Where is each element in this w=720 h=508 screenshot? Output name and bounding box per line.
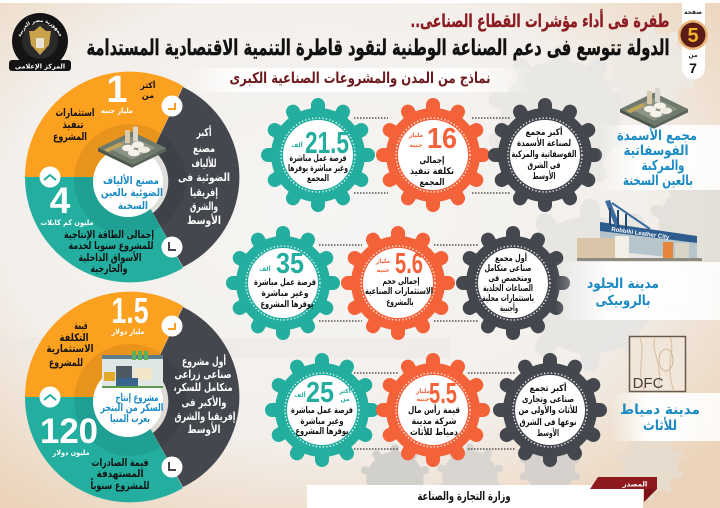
row 1 gear: jobs: ألف bbox=[291, 141, 303, 149]
page badge: من bbox=[688, 52, 698, 59]
row 1 gear: description bbox=[495, 105, 595, 205]
stat: production capacity: 4 bbox=[50, 180, 71, 221]
label: Damietta furniture city bbox=[610, 336, 720, 441]
orange segment bbox=[25, 72, 183, 177]
row 3 gear: capital: مليار bbox=[415, 388, 430, 395]
row 1 gear: jobs: 21.5 bbox=[305, 125, 349, 160]
row 3 gear: capital: قيمة رأس مال bbox=[408, 404, 460, 416]
centre label: بغرب المنيا bbox=[110, 413, 150, 425]
icon: DFC logo: DFC bbox=[633, 375, 664, 392]
stat: investment cost: مليار دولار bbox=[111, 327, 145, 336]
chevron nodes bbox=[40, 96, 182, 258]
row 1 gear: cost: إجمالى bbox=[420, 156, 444, 166]
stat: investment cost: 1.5 bbox=[112, 290, 148, 331]
icon: leather city building: Robbiki Leather City bbox=[611, 227, 670, 241]
row 3 gear: capital: شركة مدينة bbox=[412, 417, 457, 427]
stat: exports bbox=[40, 412, 150, 492]
stat: exports: للمشروع سنوياً bbox=[90, 478, 150, 492]
dark text: إفريقيا bbox=[190, 186, 218, 199]
stat: investments bbox=[53, 69, 156, 143]
row 2 gear: jobs: يوفرها المشروع bbox=[260, 300, 314, 310]
orange segment bbox=[25, 292, 183, 397]
row 2 gear: description: وأجنبية bbox=[500, 302, 518, 314]
source box bbox=[307, 477, 657, 508]
row 3 gear: jobs: أكثر bbox=[338, 387, 351, 395]
centre white disc bbox=[93, 367, 163, 437]
row 2 gear: investment: بالمشروع bbox=[386, 298, 414, 308]
icon: factory bbox=[98, 127, 166, 168]
centre label: السخنة bbox=[118, 200, 148, 212]
label: fertilizer complex bbox=[598, 88, 720, 190]
dark text: أكبر bbox=[196, 125, 212, 139]
dark text: الضوئية فى bbox=[178, 171, 230, 184]
dark text: والأكبر فى bbox=[182, 395, 227, 409]
stat: production capacity: الأسواق الداخلية bbox=[78, 251, 142, 264]
dark text: مصنع bbox=[193, 142, 215, 155]
row 1 gear: jobs: فرصة عمل مباشرة bbox=[290, 154, 347, 164]
row 3 gear: jobs: فرصة عمل مباشرة bbox=[291, 406, 353, 416]
stat: investment cost bbox=[46, 290, 148, 369]
dark text: صناعى زراعى bbox=[174, 368, 232, 381]
row 2 gear: description bbox=[463, 233, 563, 333]
row 2 gear: investment: مليار bbox=[375, 258, 390, 265]
row 2 gear: investment: 5.6 bbox=[395, 248, 423, 280]
stat: exports: 120 bbox=[40, 412, 98, 451]
row 3 gear: capital: 5.5 bbox=[429, 378, 457, 410]
row 2 gear: description: صناعى متكامل bbox=[484, 264, 532, 274]
centre label: مصنع الألياف bbox=[103, 174, 159, 187]
dark text: أول مشروع bbox=[182, 354, 226, 368]
row 3 gear: capital: جنيه bbox=[417, 396, 429, 403]
stat: investment cost: للمشروع bbox=[49, 357, 83, 369]
dark text bbox=[178, 125, 230, 227]
row 3 gear: capital: دمياط للأثاث bbox=[410, 426, 458, 438]
donut 2: sugar beet project bbox=[25, 290, 239, 502]
row 1 gear: cost: تكلفة تنفيذ bbox=[410, 167, 454, 177]
stat: exports: مليون دولار bbox=[52, 448, 90, 457]
label: Damietta furniture city: للأثاث bbox=[643, 417, 677, 434]
stat: investment cost: التكلفة bbox=[60, 332, 88, 344]
row 3 gear: description: صناعى وتجارى bbox=[522, 395, 574, 405]
logo: media center bbox=[9, 13, 71, 71]
teal segment bbox=[25, 177, 183, 282]
row 1 gear: cost: جنيه bbox=[410, 142, 422, 149]
inner shade ring bbox=[74, 344, 186, 456]
stat: production capacity: للمشروع سنويا لخدمة bbox=[68, 240, 154, 252]
dark text: إفريقيا والشرق bbox=[174, 410, 236, 423]
label: Damietta furniture city: مدينة دمياط bbox=[620, 402, 700, 418]
row 2 gear: investment: الاستثمارات الصناعية bbox=[365, 287, 433, 297]
row 3 gear: description: الأوسط bbox=[537, 427, 559, 439]
dark text: للألياف bbox=[192, 156, 216, 170]
stat: investments: من bbox=[142, 91, 154, 100]
row 2 gear: jobs: فرصة عمل مباشرة bbox=[254, 278, 316, 288]
stat: investments: 1 bbox=[106, 69, 128, 111]
label: fertilizer complex: الفوسفاتية bbox=[624, 143, 688, 159]
dark segment bbox=[153, 307, 239, 487]
label: fertilizer complex: والمركبة bbox=[642, 158, 684, 174]
centre white disc bbox=[93, 147, 163, 217]
stat: investments: أكثر bbox=[140, 80, 156, 90]
row 1 gear: cost: المجمع bbox=[420, 178, 444, 188]
page badge: صفحة bbox=[684, 9, 702, 16]
dark segment bbox=[153, 87, 239, 267]
row 2 gear: description: الصناعات الجلدية bbox=[483, 284, 533, 294]
label: Robbiki leather city: مدينة الجلود bbox=[587, 276, 659, 292]
row 3 gear: jobs: ألف bbox=[294, 391, 306, 399]
row 2 gear: investment: جنيه bbox=[377, 267, 389, 274]
row 2 gear: jobs: 35 bbox=[276, 248, 304, 280]
centre label bbox=[100, 392, 164, 425]
dark text bbox=[174, 354, 236, 436]
row 1 gear: jobs bbox=[268, 105, 368, 205]
stat: exports: المستهدفة bbox=[96, 468, 144, 480]
row 3 gear: jobs: من bbox=[340, 396, 350, 403]
row 2 gear: jobs: ألف bbox=[259, 265, 271, 273]
icon: fertilizer plant bbox=[620, 88, 688, 129]
centre label: مشروع إنتاج bbox=[116, 392, 158, 404]
row 3 gear: jobs: وغير مباشرة bbox=[300, 417, 344, 427]
label: Robbiki leather city bbox=[555, 200, 720, 320]
centre label: الضوئية بالعين bbox=[101, 187, 163, 199]
row 1 gear: jobs: المجمع bbox=[307, 174, 329, 184]
dark text: الأوسط bbox=[188, 422, 220, 436]
icon: sugar factory bbox=[102, 351, 163, 388]
row 3 gear: description: أكبر تجمع bbox=[530, 382, 566, 394]
row 1 gear: description: أكبر مجمع bbox=[526, 126, 562, 138]
row 1 gear: cost bbox=[383, 105, 483, 205]
row 1 gear: description: الأوسط bbox=[532, 170, 556, 182]
stat: production capacity: مليون كم كابلات bbox=[40, 218, 94, 227]
inner shade ring bbox=[74, 124, 186, 236]
subheading band: نماذج من المدن والمشروعات الصناعية الكبرى bbox=[230, 69, 490, 87]
row 3 gear: description: للأثاث والأولى من bbox=[518, 404, 578, 416]
page badge: 7 bbox=[689, 60, 697, 76]
icon: leather city building bbox=[577, 200, 702, 261]
stat: production capacity: والخارجية bbox=[90, 263, 128, 275]
centre label bbox=[101, 174, 163, 212]
source tab: المصدر bbox=[622, 480, 647, 488]
donut 1: optical fiber factory bbox=[25, 69, 239, 282]
row 2 gear: investment bbox=[348, 233, 448, 333]
dark text: متكامل للسكر، bbox=[174, 381, 232, 394]
title block bbox=[86, 9, 670, 61]
row 3 gear: jobs: 25 bbox=[306, 377, 334, 409]
label: Robbiki leather city: بالروبيكى bbox=[596, 293, 650, 309]
stat: investments: استثمارات bbox=[56, 107, 94, 119]
subheading band bbox=[185, 68, 535, 92]
row 2 gear: description: ومتخصص فى bbox=[488, 274, 532, 284]
stat: exports: قيمة الصادرات bbox=[92, 457, 149, 469]
logo: media center: جمهورية مصر العربية bbox=[18, 20, 61, 37]
row 3 gear: capital bbox=[383, 360, 483, 460]
stat: investment cost: قيمة bbox=[74, 320, 88, 332]
row 1 gear: cost: مليار bbox=[408, 132, 423, 139]
row 2 gear: investment: إجمالى حجم bbox=[382, 277, 420, 287]
dark text: والشرق bbox=[190, 200, 218, 213]
row 1 gear: description: لصناعة الأسمدة bbox=[517, 137, 571, 149]
row 3 gear: description bbox=[500, 360, 600, 460]
row 2 gear: jobs: وغير مباشرة bbox=[262, 289, 308, 299]
chevron nodes bbox=[40, 316, 182, 478]
top white strip bbox=[0, 0, 720, 3]
stat: investments: تنفيذ bbox=[62, 119, 84, 131]
centre label: السكر من البنجر bbox=[100, 402, 164, 414]
label: fertilizer complex: بالعين السخنة bbox=[623, 173, 693, 189]
page badge: 5 bbox=[687, 25, 699, 47]
stat: investment cost: الاستثمارية bbox=[46, 343, 94, 355]
row 3 gear: description: نوعها فى الشرق bbox=[520, 418, 576, 428]
stat: investments: المشروع bbox=[53, 131, 87, 143]
row 2 gear: description: أول مجمع bbox=[495, 252, 527, 264]
teal segment bbox=[25, 397, 183, 502]
logo: media center: المركز الإعلامى bbox=[15, 62, 65, 70]
row 3 gear: jobs bbox=[272, 360, 372, 460]
row 2 gear: jobs bbox=[233, 233, 333, 333]
stat: investments: مليار جنيه bbox=[101, 106, 133, 115]
row 1 gear: jobs: وغير مباشرة يوفرها bbox=[288, 164, 348, 174]
stat: production capacity: إجمالى الطاقة الإنتاجية bbox=[64, 229, 154, 241]
row 1 gear: description: الفوسفاتية والمركبة bbox=[512, 150, 576, 160]
row 1 gear: description: فى الشرق bbox=[528, 161, 561, 171]
row 3 gear: jobs: يوفرها المشروع bbox=[296, 427, 348, 437]
label: fertilizer complex: مجمع الأسمدة bbox=[617, 127, 697, 144]
page badge bbox=[678, 0, 708, 80]
connector dots bbox=[319, 118, 515, 449]
dark text: الأوسط bbox=[187, 213, 221, 227]
row 1 gear: cost: 16 bbox=[427, 123, 457, 155]
source box: وزارة التجارة والصناعة bbox=[418, 489, 510, 504]
stat: production capacity bbox=[40, 180, 154, 275]
row 2 gear: description: باستثمارات محلية bbox=[482, 294, 534, 304]
source tab bbox=[590, 477, 657, 502]
